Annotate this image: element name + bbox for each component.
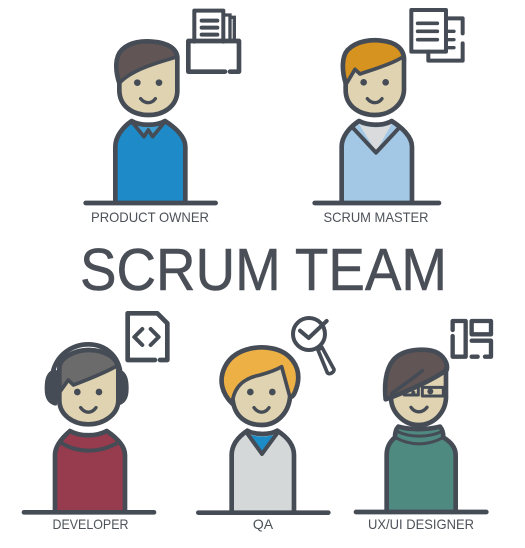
person: developer: [24, 344, 154, 512]
figure: qa: [198, 318, 334, 532]
figure: developer: [24, 313, 167, 532]
figure: ux/ui designer: [356, 321, 491, 532]
icon: documents: [411, 10, 463, 61]
icon: document folder: [188, 11, 239, 72]
person: product owner: [86, 41, 216, 203]
person: ux designer: [356, 350, 486, 512]
label: PRODUCT OWNER: [91, 209, 209, 225]
icon: code file: [128, 313, 167, 360]
figure: product owner: [86, 11, 239, 225]
icon: layout wireframe: [453, 321, 491, 357]
label: DEVELOPER: [52, 516, 128, 532]
figure: scrum master: [315, 10, 463, 225]
label: UX/UI DESIGNER: [368, 516, 474, 532]
icon: magnifier with check: [293, 318, 334, 374]
label: SCRUM MASTER: [324, 209, 428, 225]
title: SCRUM TEAM: [80, 237, 447, 303]
person: qa: [198, 347, 328, 513]
label: QA: [253, 516, 274, 532]
person: scrum master: [315, 40, 439, 203]
